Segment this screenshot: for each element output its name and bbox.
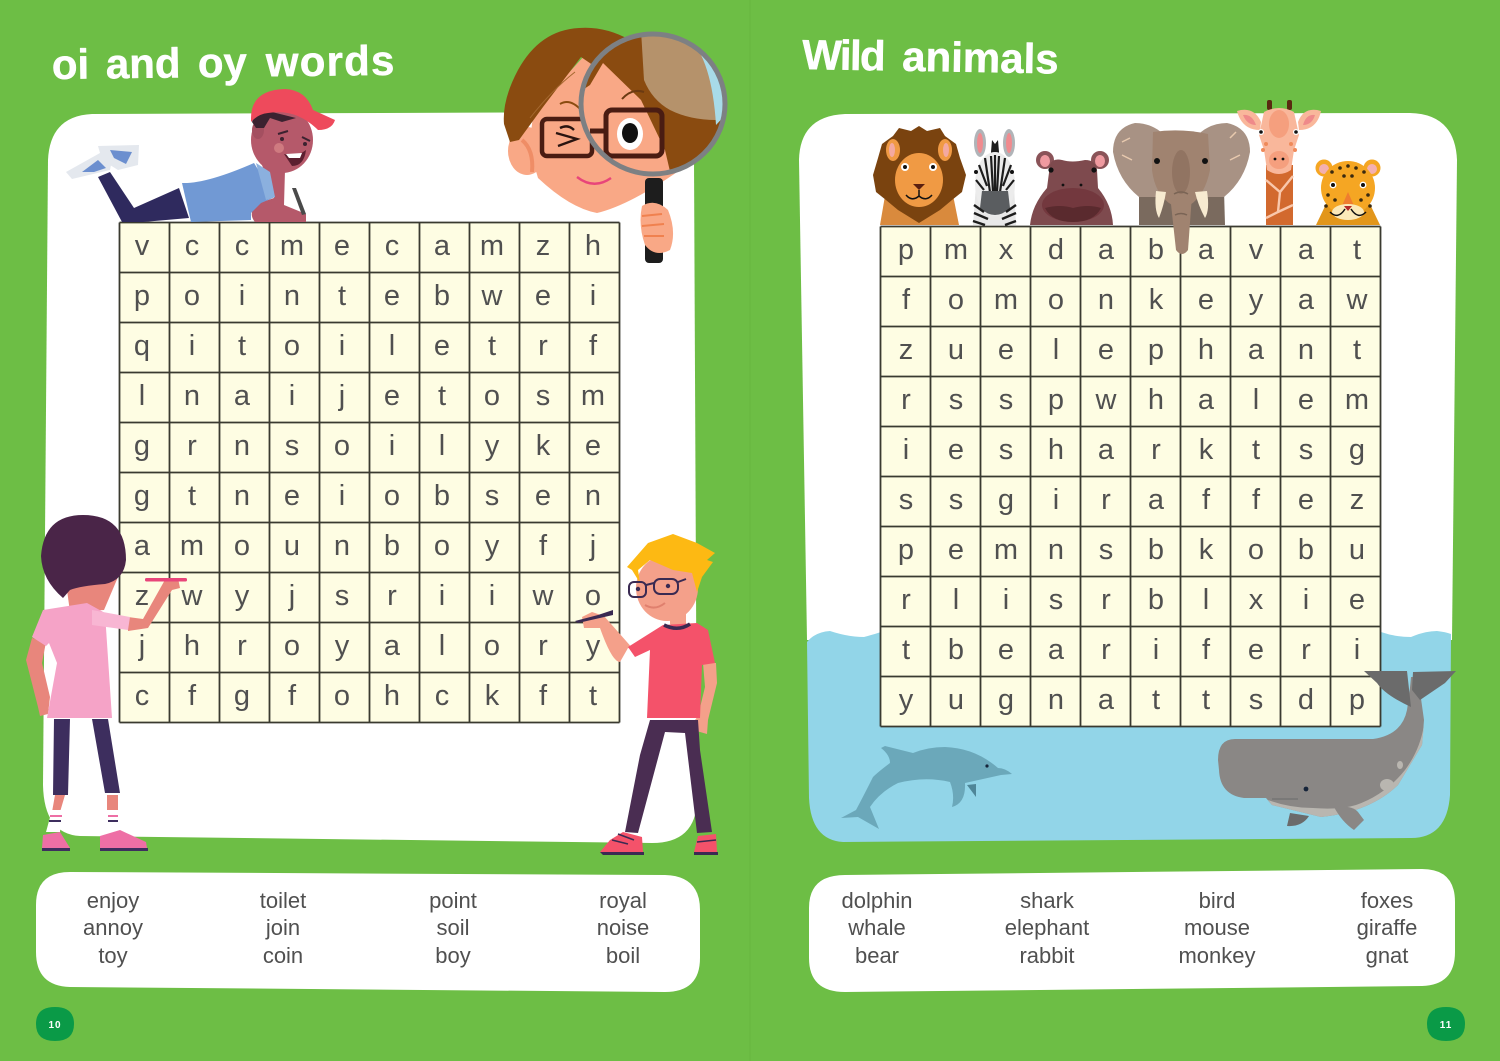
illustration: girl writing on the grid [26,515,187,851]
letter grid: wild animals: pmxdabavat [898,234,1361,266]
word list: wild animals: mouse [1184,915,1250,940]
ear [508,127,546,175]
word list: oi and oy: noise [597,915,649,940]
panel: oi and oy word search page [43,112,697,843]
word list: oi and oy: royal [599,888,647,913]
animal: elephant [1113,123,1250,254]
letter grid: wild animals [880,226,1380,726]
letter grid: wild animals: ssgiraffez [899,484,1364,516]
letter grid: wild animals: yugnattsdp [899,684,1365,716]
page number: 10: 10 [48,1020,62,1031]
letter grid: wild animals: rsspwhalem [901,384,1369,416]
page number: 11: 11 [1440,1020,1452,1031]
illustration: boy writing on the grid [575,534,718,855]
word list: oi and oy: boy [435,943,471,968]
word list: oi and oy: enjoy [87,888,139,913]
magnifier rim [581,34,725,174]
word list: oi and oy: point [429,888,477,913]
letter grid: wild animals: zuelephant [899,334,1361,366]
word list: oi and oy [36,872,700,992]
hair [504,28,630,142]
letter grid: wild animals: fomonkeyaw [902,284,1369,316]
letter grid: oi and oy: lnaijetosm [139,380,605,412]
word list: oi and oy: toy [98,943,128,968]
letter grid: oi and oy [120,222,620,722]
animal: zebra [973,129,1016,225]
panel: wild animals word search page [799,113,1457,640]
word list: oi and oy: boil [606,943,640,968]
word list: oi and oy: join [265,915,300,940]
letter grid: oi and oy: jhroyalory [138,630,601,662]
word list: wild animals: gnat [1366,943,1408,968]
word list: wild animals: bird [1199,888,1235,913]
animal: lion [873,126,966,225]
word list: wild animals: dolphin [842,888,912,913]
word list: oi and oy: soil [436,915,470,940]
animal: giraffe [1237,100,1321,225]
word list: oi and oy: annoy [83,915,143,940]
left glasses lens [542,119,592,156]
water [807,631,1451,842]
word list: wild animals: shark [1020,888,1075,913]
title: oi and oy words: words [265,37,396,85]
page number: 11 [1427,1007,1465,1041]
left eyebrow [560,102,581,110]
letter grid: wild animals: pemnsbkobu [898,534,1365,566]
word list: wild animals: rabbit [1019,943,1075,968]
animal: hippo [1030,151,1113,225]
title: oi and oy words: oi [52,41,89,88]
title: Wild animals: animals [902,33,1059,82]
letter grid: wild animals: iesharktsg [903,434,1365,466]
letter grid: oi and oy: grnsoilyke [134,430,601,462]
title: Wild animals: Wild [802,31,885,79]
lens contents [584,36,722,170]
letter grid: oi and oy: pointebwei [134,280,596,312]
word list: wild animals: giraffe [1357,915,1417,940]
word list: wild animals: foxes [1361,888,1413,913]
animal: leopard [1316,160,1380,225]
word list: wild animals: elephant [1005,915,1089,940]
word list: oi and oy: coin [263,943,303,968]
letter grid: oi and oy: qitoiletrf [134,330,598,362]
animal: dolphin [841,746,1012,829]
letter grid: oi and oy: amounboyfj [134,530,596,562]
word list: oi and oy: toilet [260,888,306,913]
title: oi and oy words: oy [198,39,248,86]
illustration: girl with magnifying glass [504,28,730,263]
smile [577,177,611,184]
word list: wild animals: monkey [1178,943,1256,968]
illustration: boy lying on the grid [66,89,335,222]
letter grid: oi and oy: zwyjsriiwo [135,580,601,612]
face [531,55,680,213]
word list: wild animals [809,869,1455,992]
letter grid: oi and oy: vccmecamzh [135,230,601,262]
letter grid: wild animals: rlisrblxie [901,584,1365,616]
page number: 10 [36,1007,74,1041]
letter grid: oi and oy: gtneiobsen [134,480,601,512]
animal: whale [1218,671,1456,830]
handle and hand [645,178,663,263]
letter grid: wild animals: tbeariferi [902,634,1360,666]
word list: wild animals: bear [855,943,899,968]
wink eye [556,126,577,146]
word list: wild animals: whale [847,915,906,940]
letter grid: oi and oy: cfgfohckft [135,680,597,712]
title: oi and oy words: and [106,39,181,87]
